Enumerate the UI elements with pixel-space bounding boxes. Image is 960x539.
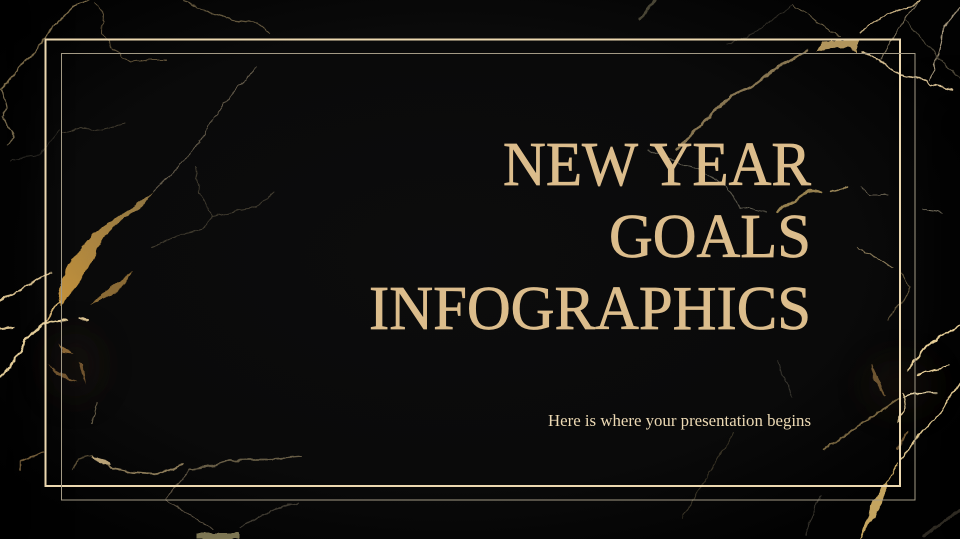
title: NEW YEAR [503,131,812,199]
subtitle: Here is where your presentation begins [548,411,811,430]
veins: bottom left [72,455,300,539]
veins: top right [640,0,960,320]
title: GOALS [609,203,811,271]
title [369,131,812,343]
veins: left gold wedge [48,192,153,423]
veins: bottom right [683,325,960,538]
veins: left pale gold [0,272,88,470]
outer frame [46,40,900,486]
veins: top left [0,0,275,247]
title: INFOGRAPHICS [369,275,811,343]
inner frame [62,54,915,500]
